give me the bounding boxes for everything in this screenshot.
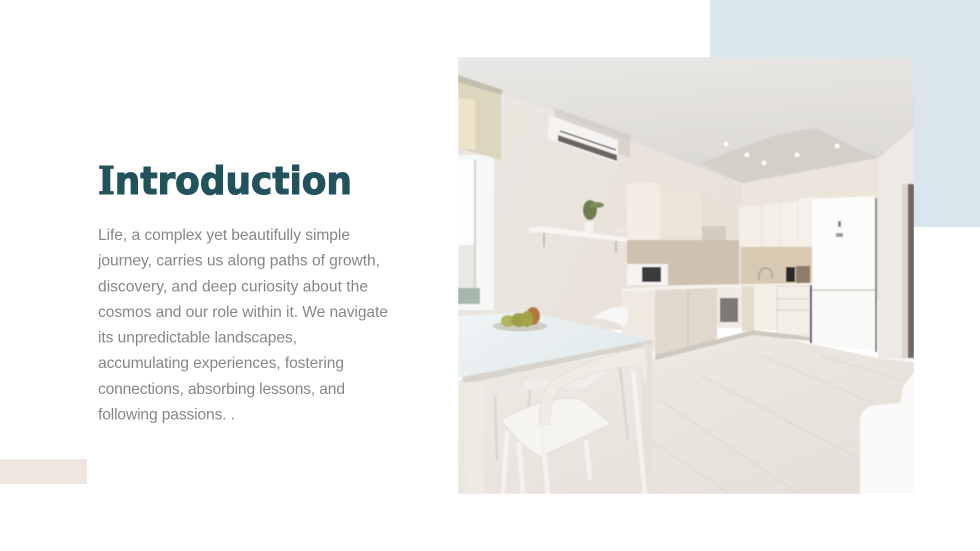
panel: beige accent bar — [0, 459, 87, 484]
text block: introduction body: connections, absorbing lessons, and — [98, 381, 345, 398]
text block: introduction body: Life, a complex yet beautifully simple — [98, 227, 350, 244]
text block: introduction body: accumulating experiences, fostering — [98, 355, 344, 372]
window blind — [458, 77, 501, 160]
downlights — [724, 142, 840, 166]
text block: introduction body: discovery, and deep curiosity about the — [98, 278, 368, 295]
panel: blue corner block — [710, 0, 980, 227]
air conditioner — [548, 108, 630, 163]
photo: white kitchen interior — [458, 57, 914, 494]
back wall — [742, 158, 878, 300]
text block: introduction body: following passions. . — [98, 406, 235, 424]
text block: introduction body: cosmos and our role within it. We navigate — [98, 304, 388, 321]
upper cabinets — [627, 182, 815, 247]
title: Introduction — [98, 158, 352, 203]
countertop — [622, 283, 812, 292]
left wall — [458, 118, 742, 330]
table — [458, 312, 654, 384]
microwave — [627, 264, 668, 285]
fruit bowl — [493, 307, 547, 332]
wall shelf with plant — [528, 200, 636, 253]
text block: introduction body: journey, carries us along paths of growth, — [97, 253, 380, 270]
back chair — [495, 307, 628, 460]
base cabinets — [622, 285, 810, 360]
refrigerator — [810, 196, 877, 352]
front chair — [501, 347, 648, 494]
window — [458, 155, 494, 310]
sofa corner — [860, 373, 914, 494]
text block: introduction body — [97, 227, 388, 424]
backsplash — [627, 240, 739, 285]
small appliances — [759, 266, 810, 283]
right wall column — [878, 128, 914, 360]
text block: introduction body: its unpredictable landscapes, — [98, 330, 297, 347]
door frame — [902, 184, 908, 358]
ceiling — [458, 57, 914, 180]
floor — [458, 332, 914, 494]
